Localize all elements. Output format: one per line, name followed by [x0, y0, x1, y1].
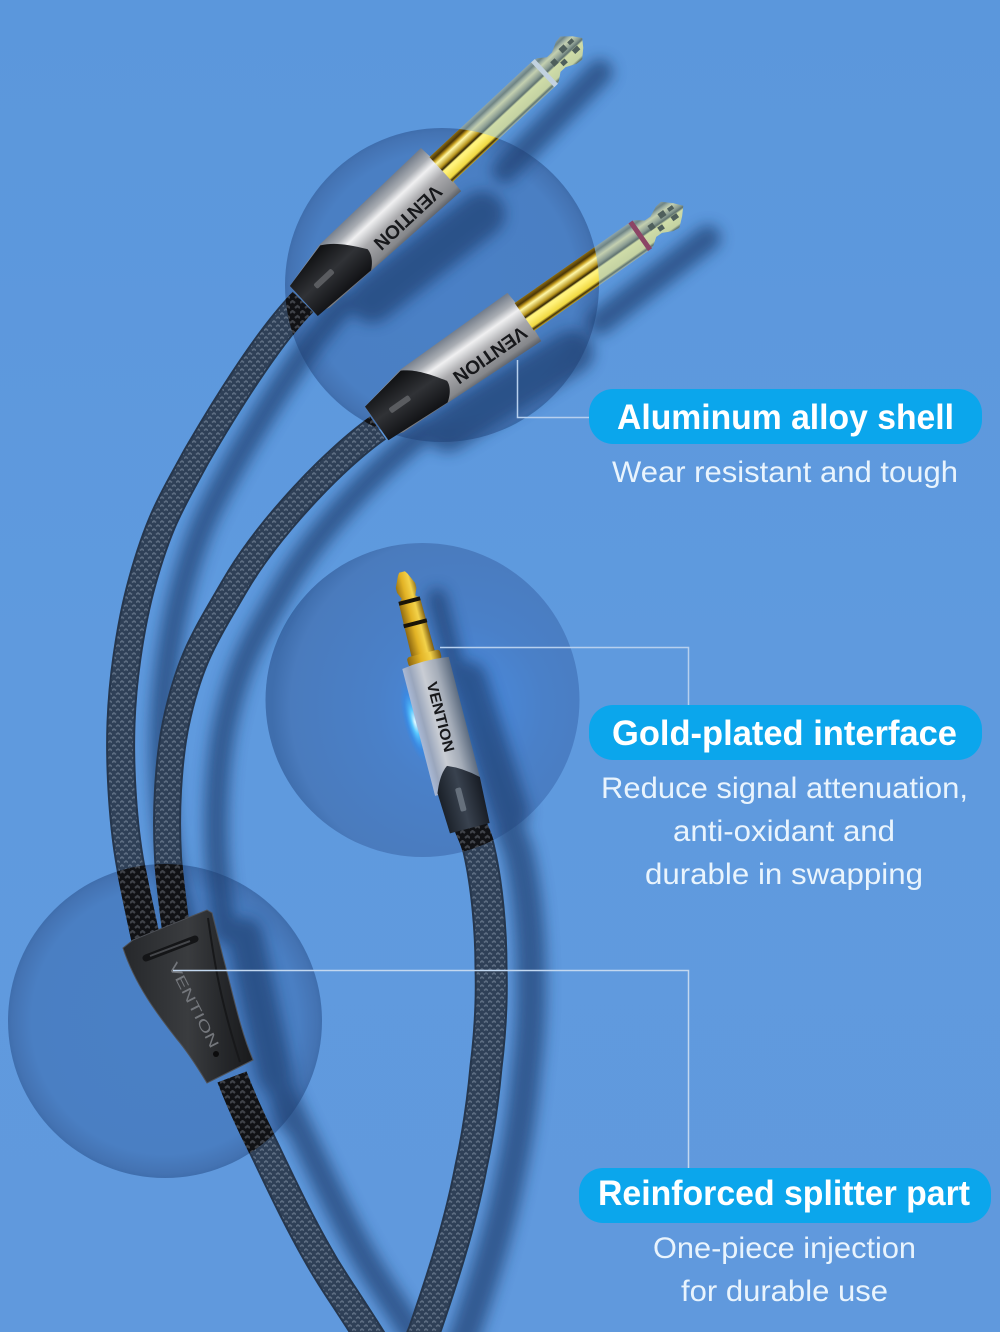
description: Reduce signal attenuation,: [601, 772, 968, 805]
splitter slot: [146, 939, 195, 958]
pill: [579, 1168, 991, 1223]
highlight circle: splitter: [8, 864, 322, 1178]
description: [601, 772, 968, 891]
pill: [589, 705, 982, 760]
highlight circle: gold-plated jack: [266, 543, 580, 857]
cable: splitter main run: [232, 1077, 375, 1332]
description: for durable use: [681, 1275, 888, 1308]
VENTION shell: [358, 292, 543, 446]
braided cables: [121, 302, 491, 1332]
callout: aluminum alloy shell: [589, 389, 982, 489]
splitter brand text: VENTION: [166, 959, 222, 1051]
pale tip: [429, 26, 594, 182]
description: anti-oxidant and: [673, 815, 895, 848]
splitter dot: [213, 1051, 219, 1057]
VENTION shell: [282, 147, 462, 321]
6.35mm plug: right: [358, 182, 700, 446]
heading: Reinforced splitter part: [598, 1174, 970, 1213]
highlight circle: aluminum shell plugs: [285, 128, 599, 442]
brand text: VENTION: [423, 680, 457, 754]
pill: [589, 389, 982, 444]
splitter body: [123, 910, 253, 1083]
gold flange: [407, 649, 442, 667]
cast shadows: [162, 72, 708, 1332]
jack rubber boot: [431, 759, 492, 834]
rubber boot: [360, 352, 457, 443]
ring: [531, 59, 558, 87]
heading: Aluminum alloy shell: [617, 398, 954, 437]
leader line: gold plating: [440, 648, 688, 705]
cable: left plug: [121, 302, 303, 945]
leader line: splitter: [173, 970, 688, 1168]
light glow beside jack: [394, 679, 436, 765]
callout: reinforced splitter part: [579, 1168, 991, 1308]
gold tip: [390, 569, 435, 657]
6.35mm plug: left: [282, 16, 602, 321]
pale tip: [515, 192, 693, 331]
heading: Gold-plated interface: [612, 714, 957, 753]
Y splitter: [123, 910, 253, 1083]
callout: gold-plated interface: [589, 705, 982, 891]
cable: jack main run: [416, 825, 491, 1332]
black braid inside circles: [116, 292, 494, 1154]
brand text: VENTION: [449, 321, 530, 387]
description: [653, 1232, 916, 1308]
description: durable in swapping: [645, 858, 923, 891]
jack shell: [402, 655, 482, 796]
cable: right plug: [167, 428, 378, 930]
ring: [628, 220, 652, 251]
splitter side band: [208, 918, 240, 1062]
rubber boot: [284, 223, 380, 318]
description: One-piece injection: [653, 1232, 916, 1265]
brand text: VENTION: [369, 180, 445, 254]
gold sleeve: right plug: [514, 247, 599, 331]
leader line: aluminum shell: [518, 360, 590, 418]
description: Wear resistant and tough: [612, 456, 958, 489]
3.5mm jack: [379, 566, 492, 835]
gold sleeve: left plug: [430, 129, 499, 182]
